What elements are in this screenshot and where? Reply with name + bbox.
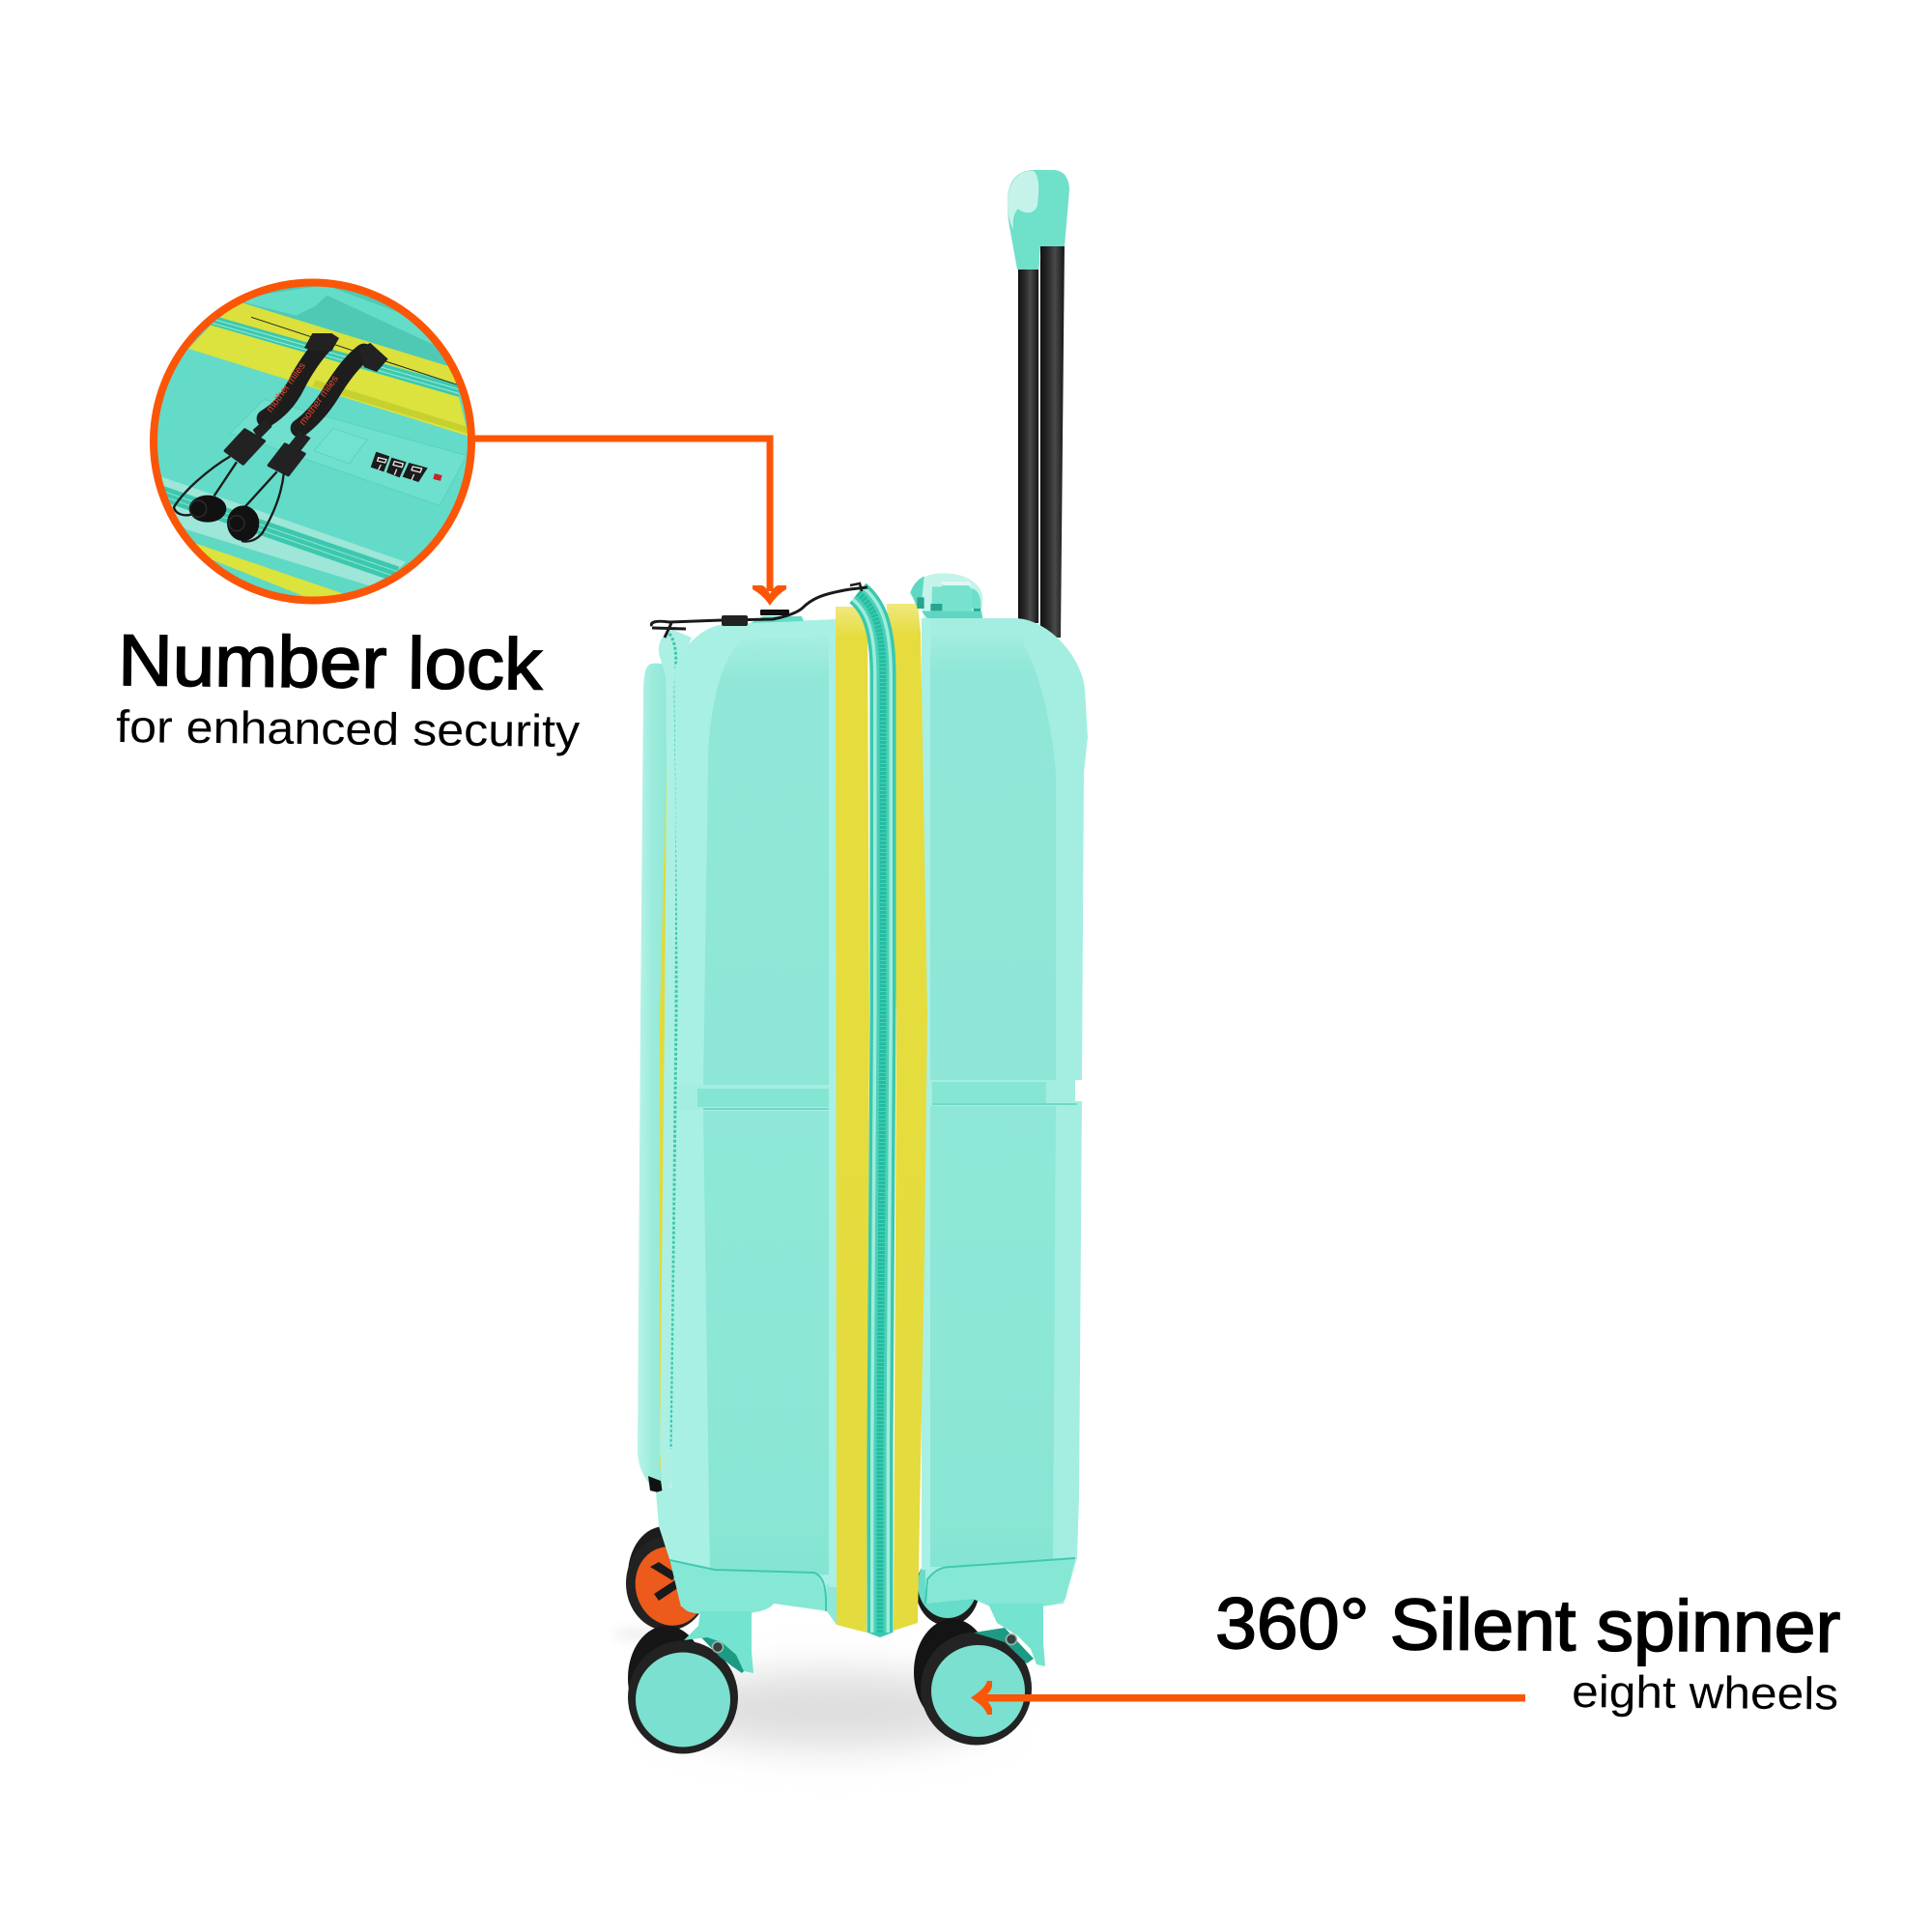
arrow to spinner wheel bbox=[971, 1681, 1525, 1715]
top zipper sliders bbox=[304, 333, 339, 351]
left strap bbox=[266, 343, 326, 418]
right front wheel pair bbox=[914, 1619, 1032, 1745]
upper zipper bbox=[211, 316, 462, 397]
yellow trim band right bbox=[887, 604, 927, 1631]
divider band right bbox=[932, 1082, 1077, 1105]
caption: enhanced security: for enhanced security bbox=[116, 700, 581, 756]
infographic canvas bbox=[116, 170, 1840, 1761]
handle grip bbox=[1008, 170, 1069, 270]
heading: number lock: Number lock bbox=[118, 619, 543, 705]
trolley poles bbox=[1018, 242, 1065, 638]
zipper pulls bbox=[189, 496, 259, 541]
upper right panel bbox=[927, 626, 1056, 1080]
number lock close-up bbox=[145, 275, 483, 613]
orange ring bbox=[154, 282, 471, 601]
suitcase shell right half bbox=[923, 618, 1088, 1606]
zipper cord seen from the side bbox=[651, 583, 867, 638]
close-up photo content: mother miles bbox=[297, 373, 341, 428]
upper yellow trim bbox=[214, 302, 467, 386]
central zipper bbox=[858, 593, 893, 1637]
left caster fork bbox=[684, 1611, 753, 1673]
right caster fork bbox=[974, 1604, 1045, 1666]
left front pocket bbox=[638, 664, 671, 1493]
floor shadow bbox=[613, 1629, 997, 1748]
rear-right wheel bbox=[916, 1550, 980, 1626]
elastic cords bbox=[174, 456, 284, 542]
top lock edge bbox=[751, 616, 804, 623]
strap brand text: mother miles bbox=[264, 360, 308, 414]
zipper fabric on the pocket bbox=[659, 630, 692, 1512]
lower yellow trim bbox=[188, 326, 469, 437]
right strap bbox=[299, 353, 364, 428]
lock plate bbox=[230, 399, 467, 505]
carry handle on top bbox=[910, 573, 982, 618]
lower right panel bbox=[930, 1106, 1056, 1567]
suitcase shell left half bbox=[656, 619, 838, 1625]
arrow from close-up to lock bbox=[473, 439, 786, 606]
close-up photo content bbox=[157, 286, 468, 597]
lower left panel bbox=[703, 1111, 829, 1575]
lower fabric strip bbox=[155, 476, 406, 586]
telescopic trolley handle bbox=[1008, 170, 1069, 638]
right skirt bbox=[925, 1558, 1075, 1606]
combination dials bbox=[371, 452, 428, 482]
yellow trim sliver bbox=[660, 763, 671, 1468]
yellow trim band left bbox=[836, 607, 869, 1633]
lower yellow sliver bbox=[195, 543, 343, 597]
red indicator bbox=[433, 473, 442, 481]
cord stoppers bbox=[225, 430, 264, 464]
heading: silent spinner: 360° Silent spinner bbox=[1215, 1582, 1840, 1667]
upper left panel bbox=[703, 636, 829, 1085]
caption: eight wheels: eight wheels bbox=[1572, 1665, 1838, 1719]
light strips beside yellow trim bbox=[829, 618, 930, 1587]
rear-left wheel with orange hub bbox=[626, 1526, 714, 1633]
lower zipper bbox=[161, 486, 399, 582]
main shell surface bbox=[188, 349, 468, 437]
background shell with handle recess bbox=[243, 286, 448, 366]
left skirt bbox=[670, 1562, 825, 1615]
black strap end bbox=[648, 1476, 663, 1493]
lock slider bbox=[314, 428, 367, 464]
left front wheel pair bbox=[628, 1626, 738, 1754]
divider band left bbox=[678, 1085, 829, 1110]
